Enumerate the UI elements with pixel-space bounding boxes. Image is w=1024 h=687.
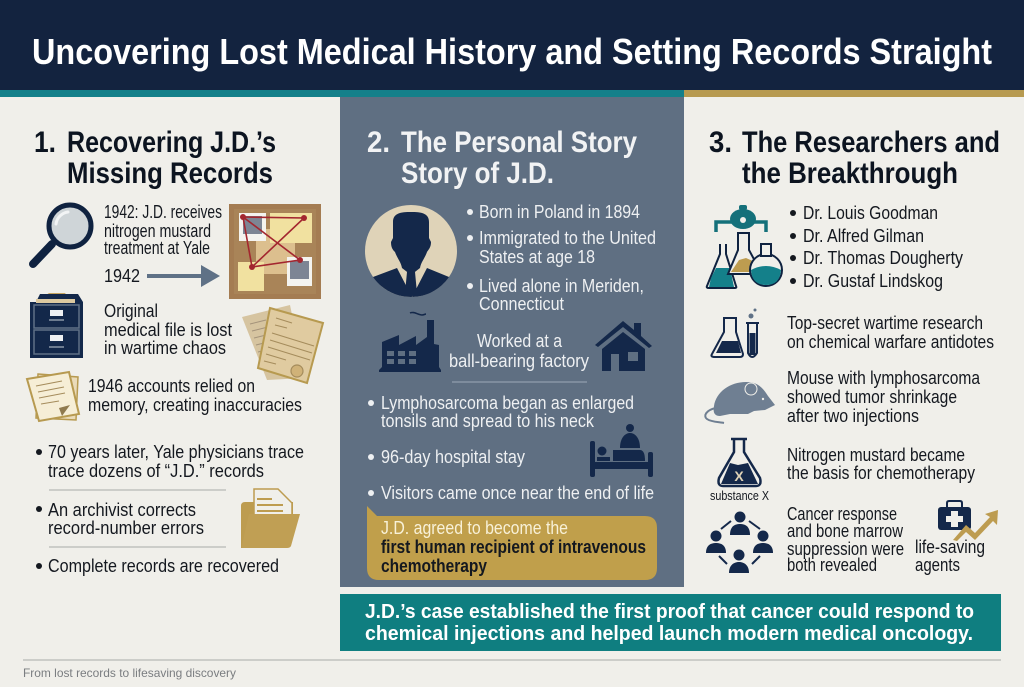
icon: house (595, 321, 652, 371)
text: 1946 accounts: 1946 accounts relied on (88, 376, 255, 396)
text: 1942 treatment: nitrogen mustard (104, 221, 211, 241)
heading: panel 2 (367, 126, 637, 190)
text: file lost: Original (104, 301, 158, 321)
text: nitrogen mustard: the basis for chemotherapy (787, 463, 975, 483)
list: biography: Immigrated to the United (479, 228, 656, 248)
icon: magnifying glass (33, 205, 91, 264)
text: cancer response: Cancer response (787, 504, 897, 524)
text: ball-bearing factory: ball-bearing factory (449, 351, 589, 371)
list: researchers: Dr. Louis Goodman (803, 203, 938, 223)
icon: hospital bed (590, 424, 653, 477)
text: ball-bearing factory: Worked at a (477, 331, 563, 351)
heading: panel 1: Recovering J.D.’s (67, 126, 276, 159)
icon: notes (27, 372, 79, 421)
callout: first human recipient: first human recipient of intravenous (381, 537, 646, 557)
list: illness: 96-day hospital stay (381, 447, 525, 467)
callout: first human recipient: chemotherapy (381, 556, 487, 576)
heading: panel 1: 1. (34, 126, 56, 159)
icon: flask and test tube (711, 308, 759, 357)
list: biography: Lived alone in Meriden, (479, 276, 644, 296)
heading: panel 3: the Breakthrough (742, 157, 958, 190)
callout: first human recipient (367, 506, 657, 580)
banner: conclusion: J.D.’s case established the first proof that cancer could respond to (365, 601, 974, 623)
list: biography: Connecticut (479, 294, 564, 314)
text: file lost: in wartime chaos (104, 338, 226, 358)
text: cancer response: and bone marrow (787, 521, 904, 541)
bullet: archivist (36, 500, 204, 538)
list: illness: tonsils and spread to his neck (381, 411, 595, 431)
text: nitrogen mustard: Nitrogen mustard became (787, 445, 965, 465)
arrow: 1942 to board (147, 265, 220, 287)
bullet: 70 years later: 70 years later, Yale physicians trace (48, 442, 304, 462)
footer text: From lost records to lifesaving discovery (23, 666, 236, 680)
bullet: 70 years later (36, 442, 304, 481)
text: mouse experiment (787, 368, 981, 426)
icon: circle of people (706, 512, 773, 573)
header banner (0, 0, 1024, 97)
text: life-saving agents (915, 537, 985, 575)
text: cancer response: both revealed (787, 555, 877, 575)
label: substance X: substance X (710, 488, 769, 503)
heading: panel 2: Story of J.D. (401, 157, 554, 190)
callout: first human recipient: J.D. agreed to become the (381, 518, 568, 538)
text: mouse experiment: Mouse with lymphosarcoma (787, 368, 981, 388)
icon: filing cabinet (30, 293, 83, 358)
heading: panel 3 (709, 126, 1000, 190)
text: wartime research (787, 313, 994, 352)
icon: mouse (705, 382, 775, 423)
text: 1946 accounts: memory, creating inaccuracies (88, 395, 302, 415)
text: ball-bearing factory (449, 331, 589, 371)
text: wartime research: Top-secret wartime research (787, 313, 983, 333)
bullet: archivist: An archivist corrects (48, 500, 196, 520)
text: 1942 treatment: 1942: J.D. receives (104, 202, 222, 222)
text: life-saving agents: life-saving (915, 537, 985, 557)
text: cancer response: suppression were (787, 539, 904, 559)
list: researchers: Dr. Alfred Gilman (803, 226, 924, 246)
bullet: 70 years later: trace dozens of “J.D.” records (48, 461, 264, 481)
heading: panel 1 (34, 126, 276, 190)
list: biography: States at age 18 (479, 247, 595, 267)
icon: substance X flask (718, 439, 760, 486)
text: cancer response (787, 504, 904, 575)
text: 1946 accounts (88, 376, 302, 415)
panel: personal story (340, 97, 684, 587)
banner: conclusion: chemical injections and helped launch modern medical oncology. (365, 623, 973, 645)
heading: panel 2: 2. (367, 126, 390, 159)
panel: recovering records (27, 126, 323, 576)
bullet: archivist: record-number errors (48, 518, 204, 538)
list: illness (368, 393, 654, 503)
list: biography (467, 202, 656, 314)
icon: person silhouette (365, 205, 457, 297)
icon: factory (379, 312, 441, 372)
text: mouse experiment: after two injections (787, 406, 919, 426)
icon: open folder (241, 489, 300, 548)
list: researchers: Dr. Thomas Dougherty (803, 248, 963, 268)
banner: conclusion (340, 594, 1001, 651)
list: illness: Visitors came once near the end of life (381, 483, 654, 503)
text: mouse experiment: showed tumor shrinkage (787, 387, 957, 407)
text: wartime research: on chemical warfare antidotes (787, 332, 994, 352)
text: 1942 treatment (104, 202, 222, 258)
heading: panel 3: 3. (709, 126, 732, 159)
text: 1942 treatment: treatment at Yale (104, 238, 210, 258)
text: life-saving agents: agents (915, 555, 960, 575)
list: researchers (790, 203, 963, 291)
icon: medical kit with rising arrow (938, 501, 998, 541)
heading: panel 2: The Personal Story (401, 126, 637, 159)
heading: panel 1: Missing Records (67, 157, 273, 190)
icon: evidence corkboard (229, 204, 321, 299)
text: file lost: medical file is lost (104, 320, 232, 340)
label: 1942: 1942 (104, 266, 140, 286)
bullet: records recovered: Complete records are recovered (48, 556, 279, 576)
list: biography: Born in Poland in 1894 (479, 202, 640, 222)
panel: researchers (705, 126, 1000, 575)
list: illness: Lymphosarcoma began as enlarged (381, 393, 634, 413)
text: file lost (104, 301, 232, 358)
text: nitrogen mustard (787, 445, 975, 483)
icon: substance X flask: X (734, 468, 744, 484)
list: researchers: Dr. Gustaf Lindskog (803, 271, 943, 291)
icon: file folder with documents (242, 305, 323, 383)
icon: lab flasks (707, 205, 782, 288)
